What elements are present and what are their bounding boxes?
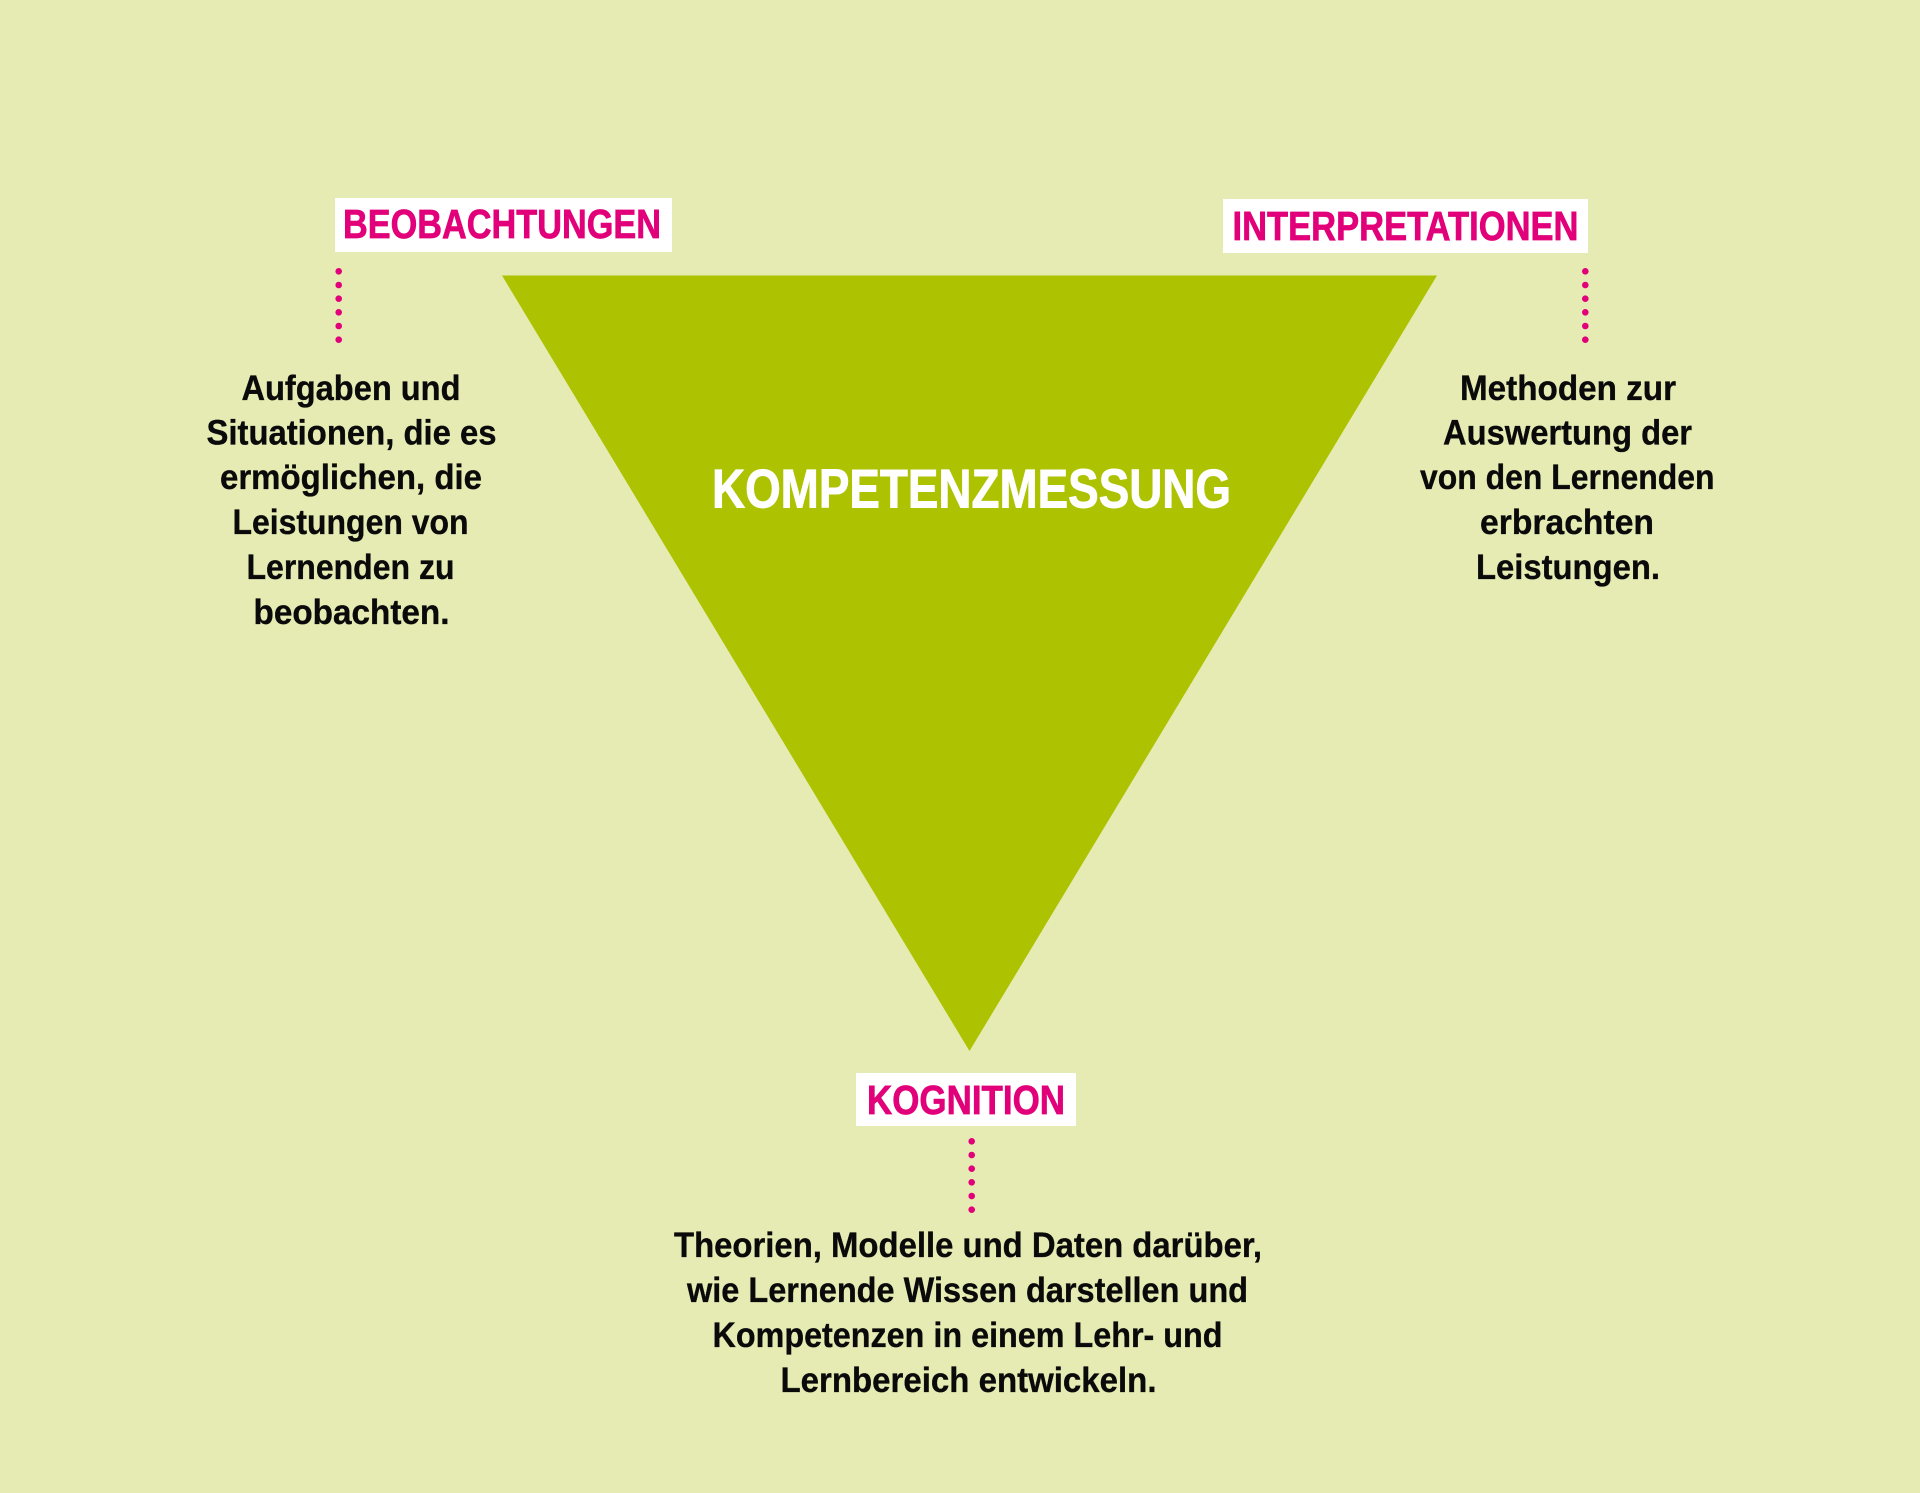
label: Kognition: KOGNITION <box>867 1077 1065 1123</box>
text block: Beobachtungen description <box>206 369 496 632</box>
text block: Kognition description: Lernbereich entwickeln. <box>780 1361 1156 1400</box>
text block: Interpretationen description: Leistungen. <box>1476 548 1660 587</box>
text block: Interpretationen description: Methoden zur <box>1460 369 1676 408</box>
dotted connector: Beobachtungen <box>335 268 342 343</box>
text block: Beobachtungen description: Situationen, die es <box>206 414 496 452</box>
label: Interpretationen: INTERPRETATIONEN <box>1232 203 1578 249</box>
label: Beobachtungen: BEOBACHTUNGEN <box>343 201 661 247</box>
text block: Kognition description <box>674 1226 1262 1400</box>
text block: Interpretationen description: Auswertung der <box>1443 414 1692 452</box>
triangle <box>502 276 1437 1051</box>
text block: Kognition description: Theorien, Modelle und Daten darüber, <box>674 1226 1262 1265</box>
dotted connector: Interpretationen <box>1582 268 1589 343</box>
text block: Interpretationen description: von den Lernenden <box>1420 458 1714 497</box>
text block: Beobachtungen description: Leistungen von <box>232 503 468 542</box>
triangle title: KOMPETENZMESSUNG <box>712 458 1231 520</box>
text block: Interpretationen description: erbrachten <box>1480 503 1654 542</box>
text block: Kognition description: wie Lernende Wissen darstellen und <box>686 1271 1248 1310</box>
text block: Beobachtungen description: Lernenden zu <box>246 548 454 587</box>
text block: Beobachtungen description: Aufgaben und <box>242 369 460 408</box>
text block: Kognition description: Kompetenzen in einem Lehr- und <box>712 1316 1222 1355</box>
text block: Beobachtungen description: ermöglichen, die <box>220 458 482 497</box>
dotted connector: Kognition <box>968 1138 975 1213</box>
text block: Interpretationen description <box>1420 369 1714 587</box>
text block: Beobachtungen description: beobachten. <box>254 593 450 632</box>
